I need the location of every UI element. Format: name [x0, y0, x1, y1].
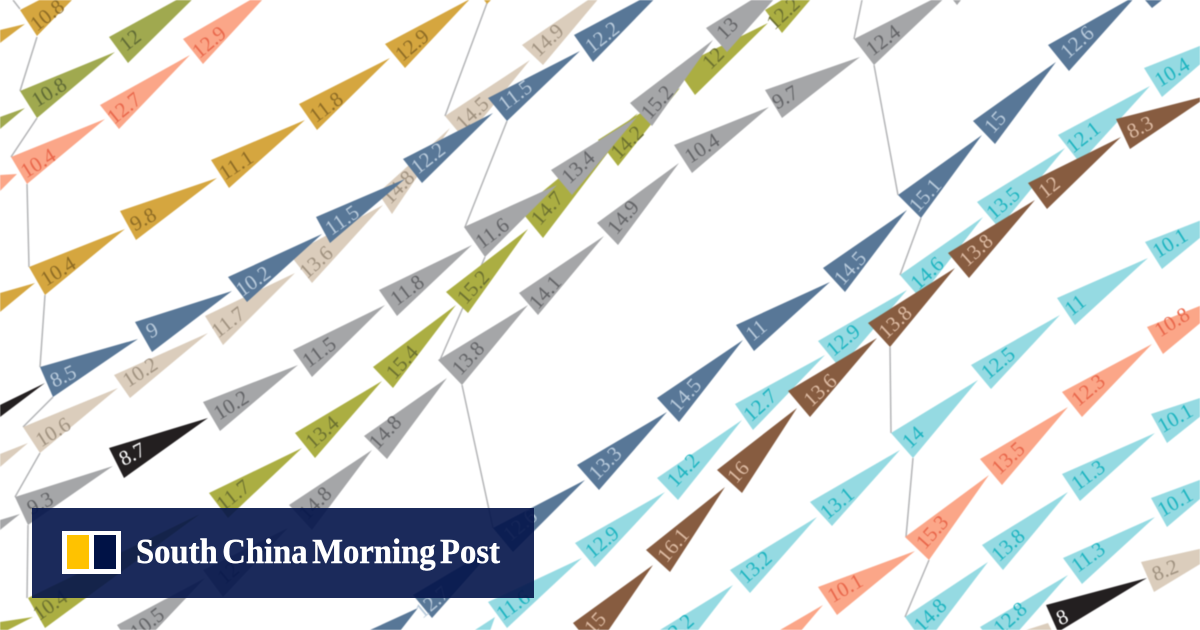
flag: gray 14.8 [289, 450, 372, 530]
flag: lime 12: 12 [697, 42, 729, 74]
flag: blue 8.5 [40, 339, 138, 397]
flag: gray 14.1: 14.1 [524, 270, 566, 314]
flag: brown 16: 16 [722, 456, 754, 488]
flag: tan 10.2 [114, 333, 208, 398]
flag: brown 8.3: 8.3 [1123, 110, 1157, 144]
series: gold arrows [0, 0, 491, 312]
flag: lime 10.4 [28, 514, 200, 628]
flag: salmon 10.1 [818, 551, 915, 615]
flag: cyan 13.2: 13.2 [733, 546, 777, 588]
wordmark: South China Morning Post [136, 532, 500, 571]
flag: gray 15.2 [630, 40, 713, 126]
flag: blue 11.5: 11.5 [493, 75, 537, 115]
flag: cyan 10.1 [1145, 205, 1200, 269]
flag: gray 13.8 [438, 305, 528, 385]
flag: brown 13.6 [788, 338, 877, 417]
flag: brown 13.8 [868, 268, 955, 347]
flag: cyan 13.8: 13.8 [986, 524, 1030, 566]
flag: blue 12.6: 12.6 [498, 504, 542, 546]
flag: tan 8.2: 8.2 [1148, 554, 1182, 586]
flag: lime 10.4: 10.4 [28, 584, 72, 625]
flag: brown 13.8: 13.8 [873, 301, 917, 343]
flag: lime 12.2 [761, 0, 840, 34]
flag: lime 11.7 [209, 448, 302, 518]
flag: tan 14.9 [522, 0, 610, 65]
flag: cyan 11 [1057, 258, 1148, 325]
flag: cyan 10.1: 10.1 [1153, 482, 1197, 522]
banner: South China Morning Post [32, 508, 534, 598]
flag: gray 13: 13 [711, 12, 743, 44]
flag: cyan 10.1: 10.1 [1148, 223, 1192, 263]
flag: lime 14.2 [598, 88, 680, 166]
flag: salmon 12.9: 12.9 [187, 21, 231, 63]
flag: cyan 14.6: 14.6 [905, 252, 949, 294]
flag: cyan 10.1 [1151, 385, 1200, 443]
flag: cyan 14.2: 14.2 [662, 448, 704, 492]
flag: brown 15 [573, 565, 653, 630]
flag: salmon 12.9 [183, 0, 276, 64]
flag: salmon 10.1: 10.1 [823, 568, 867, 608]
flag: blue 9: 9 [142, 317, 162, 343]
flag: tan 14.8: 14.8 [377, 165, 419, 209]
series: lime arrows [0, 0, 840, 630]
flag: blue 15.1: 15.1 [904, 173, 946, 217]
flag: cyan 10.1: 10.1 [1153, 398, 1197, 438]
flag: blue 13.3: 13.3 [584, 442, 626, 484]
icon: SCMP logo [62, 531, 121, 574]
flag: cyan 10.1 [1151, 465, 1200, 527]
flag: gray 9.3: 9.3 [23, 486, 57, 520]
flag: cyan 11.3 [1063, 517, 1155, 584]
flag: gray 14.8: 14.8 [364, 410, 406, 454]
flag: brown 16.1 [646, 487, 725, 572]
flag: gold 11.8: 11.8 [304, 87, 348, 127]
flag: blue 11.5: 11.5 [320, 200, 364, 240]
flag: brown 13.8: 13.8 [954, 229, 998, 271]
flag: cyan 13.1 [810, 450, 900, 526]
flag: tan 14.5: 14.5 [450, 92, 494, 134]
flag: tan 10.2: 10.2 [118, 352, 162, 392]
flag: cyan 12.7 [735, 355, 825, 430]
flag: tan 14.5 [445, 60, 530, 140]
flag: tan 14.9: 14.9 [525, 19, 569, 61]
flag: blue 15: 15 [979, 106, 1011, 138]
flag: gray 10.2: 10.2 [209, 385, 253, 425]
flag: cyan 12.1: 12.1 [1061, 116, 1105, 158]
flag: gold 10.4: 10.4 [36, 251, 80, 291]
flag: salmon 12.3 [1062, 344, 1152, 417]
flag: tan 14.8 [377, 128, 450, 214]
flag: lime 11.7: 11.7 [211, 474, 255, 516]
series: black arrows [0, 383, 1147, 630]
flag: gray 12: 12 [212, 557, 244, 589]
flag: blue 9 [135, 291, 232, 352]
flag: lime 12 [676, 23, 768, 95]
flag: tan 13.6 [290, 205, 383, 283]
flag: gray 10.4: 10.4 [680, 128, 724, 168]
flag: cyan 11.3 [1062, 433, 1155, 501]
flag: blue 12.6 [493, 480, 585, 552]
flag: gray 11.6 [464, 185, 557, 257]
flag: blue 10.2: 10.2 [231, 261, 275, 301]
flag: gray 14.1 [519, 236, 604, 315]
flag: gray 11.8: 11.8 [385, 270, 429, 310]
flag: salmon 15.3 [905, 475, 989, 560]
flag: salmon 12.7 [100, 55, 190, 129]
flag: brown 13.6: 13.6 [798, 369, 842, 411]
flag: gray 13.4: 13.4 [556, 145, 600, 188]
flag: salmon 12.3: 12.3 [1066, 369, 1110, 411]
flag: gray 14.8: 14.8 [294, 482, 336, 524]
flag: blue 14.5 [823, 210, 907, 292]
flag: blue 12.2: 12.2 [406, 137, 450, 179]
flag: gold 12.9 [385, 0, 470, 68]
flag: black 8 [1046, 578, 1147, 630]
flag: cyan 11.3: 11.3 [1066, 537, 1110, 577]
flag: tan 10.6 [23, 388, 118, 453]
flag: cyan 14: 14 [897, 421, 929, 453]
flag: cyan 12.5 [971, 315, 1060, 389]
flag: cyan 13.1: 13.1 [815, 482, 859, 524]
series: olive arrows [0, 0, 211, 129]
flag: lime 13.4: 13.4 [300, 410, 344, 453]
flag: blue 10.2 [228, 234, 322, 302]
flag: cyan 12.9 [818, 290, 907, 368]
flag: cyan 11.3: 11.3 [1066, 455, 1110, 495]
flag: gold 9.8 [120, 178, 217, 240]
flag: gold 11.8 [299, 58, 390, 130]
flag: gray 12.4: 12.4 [861, 19, 905, 61]
flag: blue 11.5 [488, 51, 580, 121]
flag: tan 8.2 [1141, 540, 1200, 592]
flag: brown 12: 12 [1033, 171, 1065, 203]
flag: gray 9.7 [765, 57, 860, 118]
flag: gold 11.1: 11.1 [214, 145, 258, 185]
flag: blue 12.7: 12.7 [410, 581, 454, 623]
flag: cyan 13.5 [977, 148, 1065, 228]
flag: blue 15.1 [898, 135, 982, 218]
flag: gray 11.5 [293, 305, 385, 377]
flag: gray 13 [706, 0, 800, 52]
flag: cyan 12.5: 12.5 [976, 342, 1020, 384]
flag: cyan 12.9: 12.9 [821, 319, 865, 361]
flag: cyan 12.2 [655, 585, 733, 630]
flag: brown 13.8 [948, 200, 1035, 278]
flag: cyan 13.2 [730, 517, 817, 593]
connector lines [11, 0, 929, 617]
flag: cyan 11.6 [488, 558, 582, 628]
flag: blue 12.2: 12.2 [580, 16, 624, 58]
flag: cyan 14.8 [905, 562, 988, 630]
flag: gray 12 [203, 528, 288, 597]
flag: black 8.7: 8.7 [115, 437, 149, 471]
flag: gray 11.6: 11.6 [470, 213, 514, 253]
flag: lime 14.7: 14.7 [526, 186, 568, 230]
flag: salmon 10.4: 10.4 [16, 143, 60, 183]
series: cyan arrows [475, 30, 1200, 630]
flag: salmon 15.3: 15.3 [911, 510, 953, 554]
flag: gray 13.4 [551, 117, 637, 195]
flag: blue 13.3 [577, 412, 667, 490]
flag: olive 10.8: 10.8 [27, 72, 71, 112]
flag: brown 16.1: 16.1 [652, 523, 694, 567]
flag: cyan 13.8 [982, 492, 1068, 570]
flag: gray 10.5 [117, 578, 205, 630]
flag: lime 14.7 [520, 113, 638, 238]
flag: blue 14.5 [657, 340, 743, 422]
flag: gray 15.2: 15.2 [636, 80, 678, 124]
flag: cyan 12.9: 12.9 [580, 521, 624, 563]
flag: gray 13.8: 13.8 [447, 336, 489, 380]
flag: tan 11.7 [205, 273, 295, 345]
flag: gray 9.3 [15, 466, 113, 525]
series: brown arrows [573, 95, 1200, 630]
flag: blue 11: 11 [741, 314, 771, 346]
flag: blue 12.6 [1048, 0, 1137, 71]
flag: cyan 14.2 [657, 420, 742, 500]
flag: blue 15 [973, 62, 1056, 144]
flag: lime 15.4 [373, 305, 456, 388]
flag: gray 10.2 [203, 365, 298, 431]
flag: cyan 10.4: 10.4 [1150, 52, 1194, 92]
flag: brown 8.3 [1116, 95, 1200, 149]
flag: gold 10.4 [29, 229, 125, 295]
flag: cyan 12.7: 12.7 [738, 384, 782, 426]
flag: cyan 12.8 [980, 575, 1068, 630]
flag: lime 13.4 [295, 381, 382, 458]
flag: cyan 13.5: 13.5 [981, 182, 1025, 224]
flag: cyan 14 [891, 380, 978, 458]
flag: lime 15.4: 15.4 [381, 340, 424, 384]
flag: blue 12.6: 12.6 [1055, 21, 1099, 63]
flag: salmon 10.4 [11, 119, 105, 184]
flag: lime 15.2: 15.2 [452, 265, 494, 309]
flag: gray 11.5: 11.5 [297, 332, 341, 372]
flag: tan 10.6: 10.6 [31, 412, 75, 452]
flag: salmon 10.8: 10.8 [1150, 302, 1194, 342]
flag: blue 14.5: 14.5 [664, 373, 706, 417]
flag: cyan 11.6: 11.6 [491, 585, 535, 625]
flag: tan 13.6: 13.6 [294, 241, 338, 283]
flag: gold 12.9: 12.9 [390, 24, 434, 66]
flag: cyan 11: 11 [1060, 289, 1090, 321]
flag: blue 12.2 [403, 113, 493, 183]
flag: tan 11.7: 11.7 [206, 301, 250, 343]
flag: blue 8.5: 8.5 [46, 360, 80, 392]
flag: gold 11.1 [211, 120, 305, 188]
flag: blue 12.7 [410, 545, 497, 623]
flag: olive 12 [109, 0, 211, 63]
flag: brown 12 [1028, 137, 1121, 209]
flag: salmon 13.5 [980, 407, 1068, 485]
flag: lime 15.2 [446, 229, 528, 313]
flag: gray 12.4 [854, 0, 955, 65]
flag: salmon 10.8 [1147, 290, 1200, 354]
flag: blue 11.5 [316, 179, 405, 243]
flag: salmon 13.5: 13.5 [986, 437, 1030, 479]
flag: gold 10.8 [20, 0, 105, 36]
flag: olive 12: 12 [114, 24, 146, 56]
flag: gray 11.8 [379, 245, 472, 316]
flag: blue 14.5: 14.5 [829, 246, 871, 290]
flag: blue 12.2 [574, 0, 668, 62]
flag: cyan 12.1 [1058, 86, 1150, 163]
flag: gray 14.9 [597, 163, 679, 245]
flag: black 8: 8 [1052, 604, 1072, 630]
flag: gray 14.8 [364, 378, 447, 459]
flag: cyan 14.6 [900, 217, 983, 298]
flag: cyan 10.4 [1144, 30, 1200, 97]
flag: black 8.7 [109, 418, 208, 478]
flag: gray 14.9: 14.9 [602, 195, 644, 239]
flag: salmon 12.7: 12.7 [102, 87, 146, 129]
flag: gold 9.8: 9.8 [126, 202, 160, 236]
flag: gray 10.4 [674, 107, 769, 173]
flag: gray 9.7: 9.7 [768, 80, 802, 114]
flag: lime 14.2: 14.2 [606, 121, 648, 163]
flag: blue 11 [736, 282, 830, 351]
flag: olive 10.8 [20, 52, 115, 118]
flag: cyan 12.9 [575, 492, 665, 567]
flag: brown 16 [717, 408, 797, 493]
